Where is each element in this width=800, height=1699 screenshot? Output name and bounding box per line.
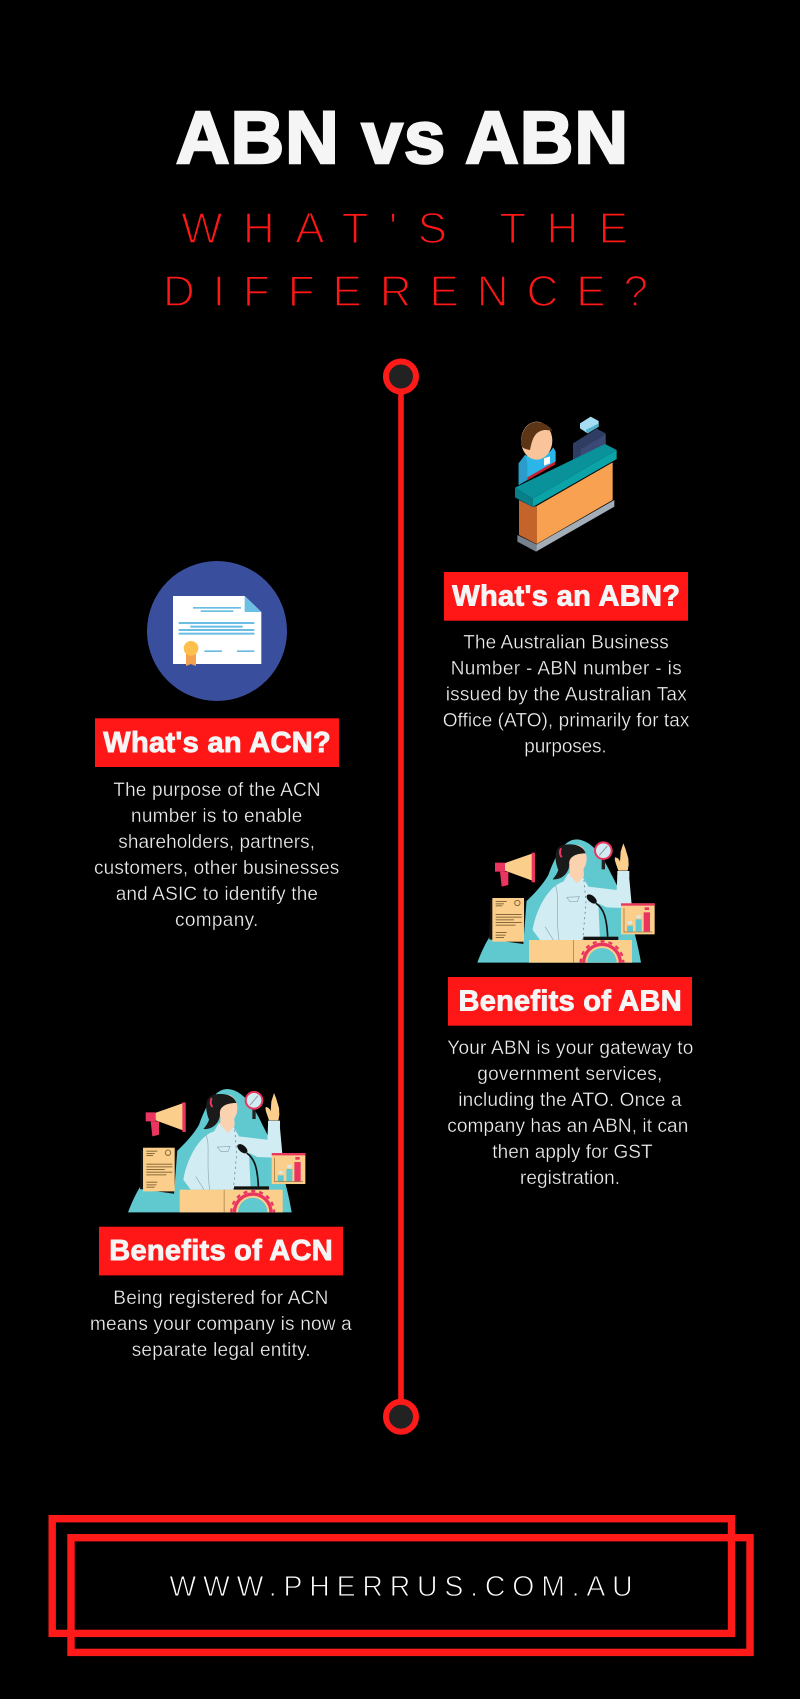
text: benefits of ABN: then apply for GST [492,1142,653,1163]
heading: what's an ABN: What's an ABN? [452,581,680,613]
heading: benefits of ACN: Benefits of ACN [109,1235,333,1267]
website address: WWW.PHERRUS.COM.AU [169,1571,633,1603]
text: benefits of ACN: Being registered for ACN [113,1288,328,1309]
text: benefits of ACN: separate legal entity. [132,1340,311,1361]
icon: reception counter [515,417,617,552]
text: what's an ACN: and ASIC to identify the [116,884,318,905]
icon: certificate [147,561,287,701]
title: ABN vs ABN [176,96,628,179]
text: what's an ABN: issued by the Australian Tax [446,684,687,705]
panel: what's an ABN [443,417,690,757]
text: benefits of ACN [90,1288,352,1361]
text: what's an ABN: Number - ABN number - is [451,658,682,679]
heading: benefits of ACN [99,1227,343,1275]
heading: what's an ABN [444,572,688,621]
footer: website frame [52,1519,750,1652]
text: benefits of ACN: means your company is now a [90,1314,352,1335]
text: what's an ABN: The Australian Business [463,632,669,653]
text: what's an ACN: The purpose of the ACN [113,780,321,801]
subtitle: DIFFERENCE? [163,267,648,316]
heading: benefits of ABN: Benefits of ABN [458,986,682,1018]
panel: benefits of ACN [90,1089,352,1361]
text: what's an ACN: shareholders, partners, [118,832,315,853]
panel: what's an ACN [94,561,339,931]
subtitle: WHAT'S THE [181,204,628,253]
text: benefits of ABN: government services, [477,1064,662,1085]
text: benefits of ABN: registration. [520,1168,620,1189]
heading: what's an ACN: What's an ACN? [103,727,331,759]
text: benefits of ABN: company has an ABN, it can [447,1116,688,1137]
text: what's an ABN: Office (ATO), primarily for tax [443,710,690,731]
icon: woman at podium [477,839,655,963]
text: what's an ACN: company. [175,910,258,931]
timeline [386,362,416,1432]
heading: what's an ACN [95,718,339,767]
text: benefits of ABN: including the ATO. Once a [458,1090,682,1111]
text: what's an ACN [94,780,339,931]
text: benefits of ABN: Your ABN is your gateway to [447,1038,693,1059]
heading: benefits of ABN [448,977,692,1026]
panel: benefits of ABN [447,839,693,1189]
text: what's an ABN [443,632,690,757]
text: benefits of ABN [447,1038,693,1189]
text: what's an ACN: customers, other businesses [94,858,339,879]
text: what's an ACN: number is to enable [131,806,302,827]
subtitle [163,204,648,316]
icon: woman at podium [128,1089,305,1212]
text: what's an ABN: purposes. [524,736,607,757]
